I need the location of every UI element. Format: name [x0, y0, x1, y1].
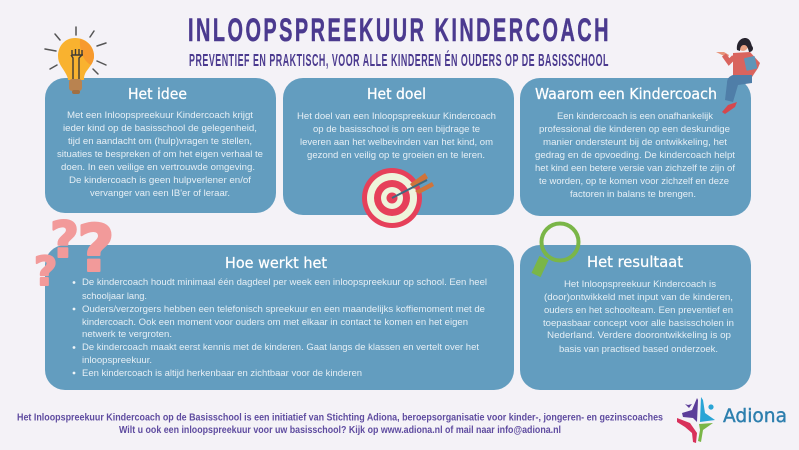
text: het resultaat: basis van practised based onderzoek. [559, 343, 718, 354]
text: het doel [297, 110, 496, 160]
icon: question marks [34, 211, 115, 295]
panel: waarom een kindercoach [520, 78, 751, 216]
text: waarom een kindercoach: het kind een betere versie van zichzelf te zijn of [535, 162, 735, 173]
text: het doel: gezond en veilig op te groeien en te leren. [307, 149, 485, 160]
list: hoe werkt het: inloopspreekuur. [82, 354, 152, 365]
footer text: Het Inloopspreekuur Kindercoach op de Basisschool is een initiatief van Stichting Adiona, beroepsorganisatie voor kinder-, jongeren- en gezinscoaches [17, 412, 663, 424]
logo: Adiona: Adiona [723, 405, 787, 427]
panel: hoe werkt het [45, 245, 514, 390]
list: hoe werkt het: De kindercoach houdt minimaal één dagdeel per week een inloopspreekuur op school. Een heel [82, 276, 487, 287]
icon: question marks: ? [50, 211, 79, 269]
list: hoe werkt het: schooljaar lang. [82, 290, 147, 301]
heading: het resultaat: Het resultaat [587, 253, 683, 271]
text: het resultaat: toepasbaar concept voor alle basisscholen in [543, 317, 734, 328]
text: het resultaat [543, 278, 734, 354]
panel: het doel [283, 78, 514, 215]
icon: light bulb [45, 27, 106, 94]
text: het idee: doen. In een veilige en vertrouwde omgeving. [61, 161, 255, 172]
text: het resultaat: Het Inloopspreekuur Kindercoach is [564, 278, 716, 289]
text: waarom een kindercoach: factoren in balans te brengen. [570, 188, 696, 199]
panel: het idee [45, 78, 276, 213]
icon: magnifying glass [536, 224, 578, 275]
text: het idee: vervanger van een IB'er of leraar. [90, 187, 230, 198]
text: het idee: Met een Inloopspreekuur Kindercoach krijgt [67, 109, 253, 120]
heading: het doel: Het doel [367, 85, 426, 103]
text: het idee: tijd en aandacht om (hulp)vragen te stellen, [68, 135, 252, 146]
text: het doel: op de basisschool is om een bijdrage te [313, 123, 480, 134]
list: hoe werkt het: netwerk te vergroten. [82, 328, 172, 339]
footer text: Wilt u ook een inloopspreekuur voor uw basisschool? Kijk op www.adiona.nl of mail naar info@adiona.nl [119, 425, 561, 436]
text: waarom een kindercoach: te worden, op te komen voor zichzelf en deze [539, 175, 729, 186]
heading: hoe werkt het: Hoe werkt het [225, 254, 327, 272]
list: hoe werkt het: De kindercoach maakt eerst kennis met de kinderen. Gaat langs de klassen en vertelt over het [82, 341, 479, 352]
text: het resultaat: Nederland. Verdere doorontwikkeling is op [547, 329, 731, 340]
text: waarom een kindercoach: gedrag en de opvoeding. De kindercoach helpt [535, 149, 735, 160]
text: het idee [57, 109, 263, 198]
text: het idee: situaties te bespreken of om het eigen verhaal te [57, 148, 263, 159]
text: waarom een kindercoach [535, 110, 735, 199]
icon: question marks: ? [77, 212, 115, 287]
text: het idee: De kindercoach is geen hulpverlener en/of [69, 174, 251, 185]
logo: Adiona [677, 397, 787, 443]
text: het resultaat: (door)ontwikkeld met input van de kinderen, [544, 291, 733, 302]
list: hoe werkt het: Een kindercoach is altijd herkenbaar en zichtbaar voor de kinderen [82, 367, 362, 378]
icon: woman sitting on panel [716, 38, 760, 114]
icon: target with arrow [362, 168, 434, 228]
heading: het idee: Het idee [128, 85, 187, 103]
text: waarom een kindercoach: professional die kinderen op een deskundige [539, 123, 730, 134]
text: het doel: leveren aan het welbevinden van het kind, om [300, 136, 493, 147]
list: hoe werkt het: kindercoach. Ook een moment voor ouders om met elkaar in contact te komen en het eigen [82, 316, 468, 327]
list: hoe werkt het [73, 276, 487, 378]
text: het idee: ieder kind op de basisschool de gelegenheid, [63, 122, 257, 133]
footer text [17, 412, 663, 436]
text: het resultaat: ouders en het schoolteam. Een preventief en [544, 304, 733, 315]
text: waarom een kindercoach: manier ondersteunt bij de ontwikkeling, het [543, 136, 727, 147]
list: hoe werkt het: Ouders/verzorgers hebben een telefonisch spreekuur en een maandelijks koffiemoment met de [82, 303, 485, 314]
panel: het resultaat [520, 245, 751, 390]
text: waarom een kindercoach: Een kindercoach is een onafhankelijk [557, 110, 713, 121]
icon: question marks: ? [34, 249, 57, 295]
text: het doel: Het doel van een Inloopspreekuur Kindercoach [297, 110, 496, 121]
heading: waarom een kindercoach: Waarom een Kindercoach [535, 85, 717, 103]
